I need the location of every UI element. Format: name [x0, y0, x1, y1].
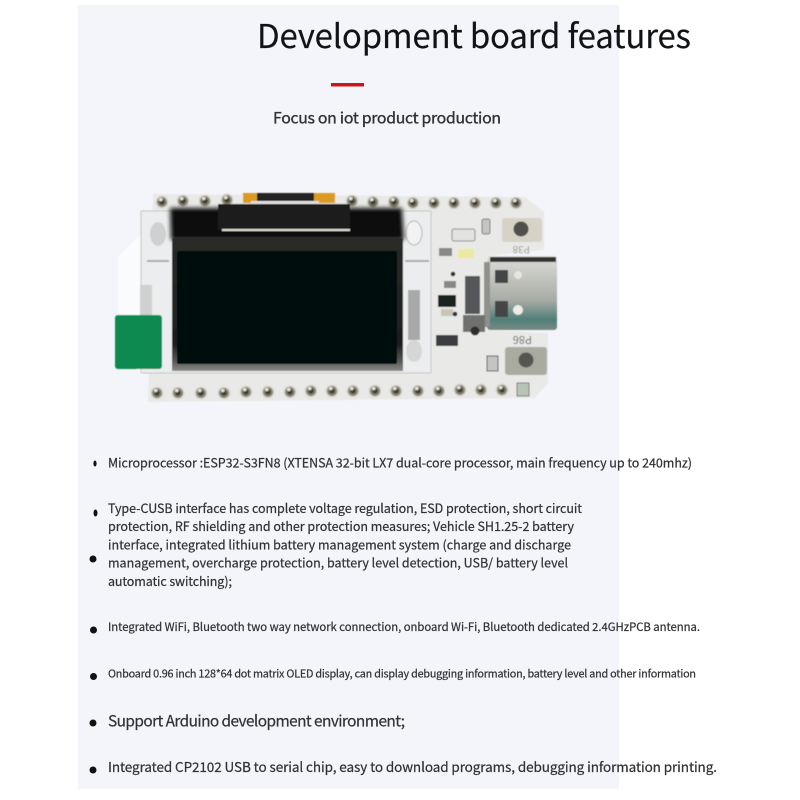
spec: CP2102: Integrated CP2102 USB to serial chip, easy to download programs, debugging information printing.: [108, 756, 717, 776]
spec: Type-C USB interface: Type-CUSB interface has complete voltage regulation, ESD protection, short circuit: [108, 498, 582, 517]
OLED glass: [172, 238, 403, 371]
spec: Type-C USB interface: interface, integrated lithium battery management system (charge and discharge: [108, 534, 571, 554]
spec: OLED display: Onboard 0.96 inch 128*64 dot matrix OLED display, can display debugging information, battery level and other information: [108, 666, 696, 682]
button 1SR: [482, 218, 542, 242]
top pin row: [156, 194, 522, 209]
small components: [436, 272, 485, 346]
green pull tab: [115, 315, 162, 369]
spec: Arduino: Support Arduino development environment;: [108, 710, 405, 732]
bullet: CP2102: [90, 766, 96, 774]
silkscreen 1SR: P38: [512, 243, 530, 258]
bullet: microprocessor: [93, 460, 97, 466]
orange ribbon: [243, 193, 335, 204]
film tab: [118, 233, 142, 376]
OLED screen: [177, 251, 397, 364]
button 2: [487, 347, 547, 375]
USB-C connector: [484, 256, 557, 330]
spec: Type-C USB interface: protection, RF shielding and other protection measures; Vehicle SH1.25-2 battery: [108, 516, 574, 535]
spec: WiFi and Bluetooth: Integrated WiFi, Bluetooth two way network connection, onboard Wi-Fi, Bluetooth dedicated 2.4GHzPCB antenna.: [108, 619, 700, 635]
title: Development board features: [257, 10, 691, 58]
spec: Type-C USB interface: management, overcharge protection, battery level detection, USB/ battery level: [108, 552, 568, 572]
background panel: [78, 5, 619, 789]
white LED area: [439, 229, 475, 258]
spec: microprocessor: Microprocessor :ESP32-S3FN8 (XTENSA 32-bit LX7 dual-core processor, main frequency up to 240mhz): [108, 452, 692, 472]
spec: Type-C USB interface: [108, 498, 582, 590]
bullet: OLED: [90, 673, 97, 680]
product photo: development board: [115, 193, 557, 402]
bullet: WiFi: [90, 626, 97, 634]
subtitle: Focus on iot product production: [273, 106, 501, 128]
bullet: Type-C upper mark: [94, 510, 98, 516]
dark adhesive: [170, 208, 404, 240]
circuit board: [148, 194, 548, 402]
red accent bar: [331, 83, 364, 86]
silkscreen P86: P86: [513, 332, 532, 348]
bottom pin row: [151, 383, 529, 399]
spec: Type-C USB interface: automatic switching);: [108, 571, 232, 590]
ribbon block: [218, 204, 350, 231]
clear plastic frame: [141, 211, 431, 373]
bullet: Arduino: [90, 720, 96, 726]
bullet: Type-C: [90, 556, 96, 562]
